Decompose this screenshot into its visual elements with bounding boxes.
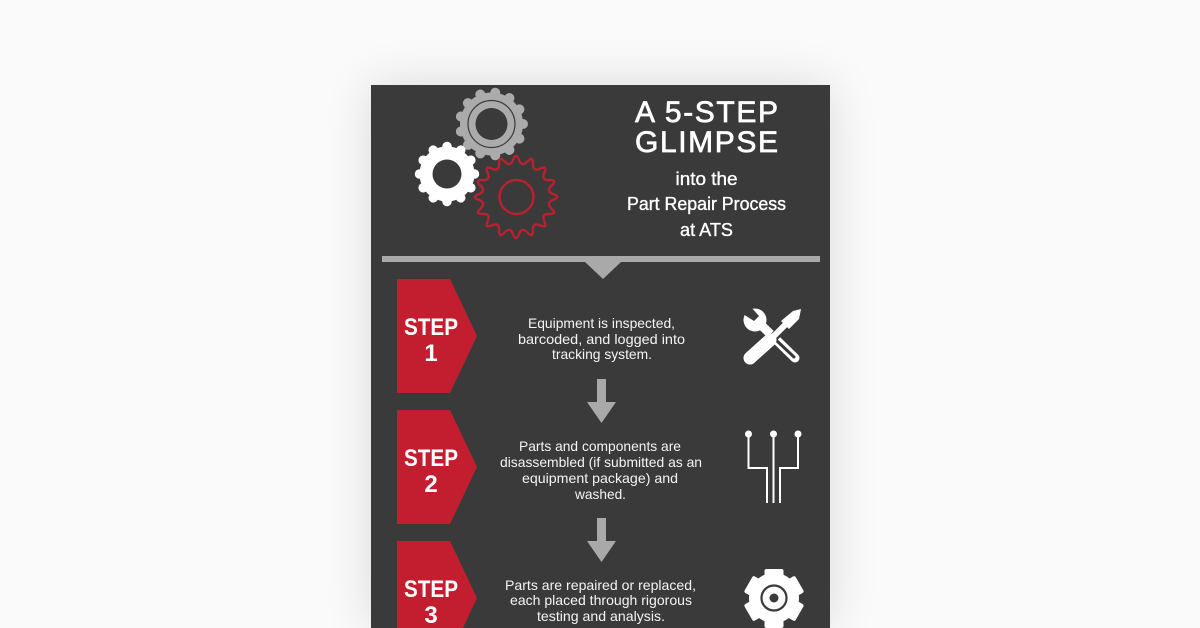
subtitle <box>627 169 786 240</box>
step 3 text: each placed through rigorous <box>510 592 692 608</box>
icon: white gear <box>420 146 474 202</box>
icon: cog <box>744 569 804 628</box>
step 1 badge <box>397 279 477 393</box>
step 2 text: Parts and components are <box>519 438 681 454</box>
step 2 badge <box>397 410 477 524</box>
icon: red outline gear <box>475 156 557 238</box>
step 1 text <box>518 315 685 362</box>
panel: dark infographic card <box>371 85 830 628</box>
step 1 text: Equipment is inspected, <box>528 315 675 331</box>
step 1 badge: STEP <box>404 314 458 341</box>
arrow 1 <box>587 379 616 423</box>
step 2 text: disassembled (if submitted as an <box>500 454 702 470</box>
subtitle: Part Repair Process <box>627 194 786 214</box>
icon: wrench and screwdriver <box>743 306 801 358</box>
step 2 text: washed. <box>574 486 626 502</box>
step 1 text: barcoded, and logged into <box>518 331 685 347</box>
step 3 text: Parts are repaired or replaced, <box>505 577 696 593</box>
step 1 badge: 1 <box>424 340 438 367</box>
step 2 text: equipment package) and <box>522 470 678 486</box>
step 2 text <box>500 438 702 502</box>
step 1 text: tracking system. <box>552 346 652 362</box>
title: GLIMPSE <box>635 126 778 159</box>
title <box>635 96 778 159</box>
step 3 text <box>505 577 696 624</box>
step 2 badge: 2 <box>424 471 438 498</box>
subtitle: into the <box>676 169 738 189</box>
step 2 badge: STEP <box>404 445 458 472</box>
step 3 badge <box>397 541 477 628</box>
arrow 2 <box>587 518 616 562</box>
title: A 5-STEP <box>635 96 778 129</box>
icon: circuit lines <box>745 430 802 503</box>
divider with pointer <box>382 256 820 279</box>
step 3 text: testing and analysis. <box>537 608 665 624</box>
icon: grey gear <box>460 92 523 156</box>
step 3 badge: STEP <box>404 576 458 603</box>
subtitle: at ATS <box>680 220 733 240</box>
